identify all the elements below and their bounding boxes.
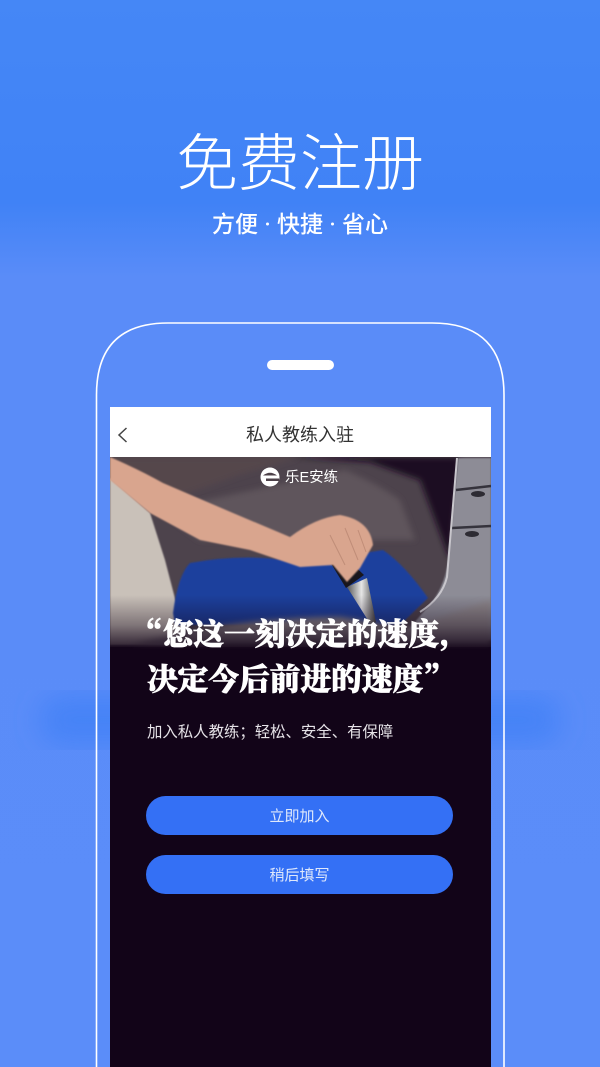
subtitle: 方便 <box>212 211 258 237</box>
button: fill later <box>146 855 453 894</box>
button: join now <box>146 796 453 835</box>
subtitle <box>212 211 388 237</box>
gear knob <box>332 564 376 624</box>
logo <box>260 468 338 486</box>
subtitle: 省心 <box>342 211 388 237</box>
fade <box>110 598 491 649</box>
header bar <box>110 407 491 457</box>
app screen <box>110 407 491 1067</box>
headline line 2: 决定今后前进的速度” <box>147 655 454 699</box>
icon: e logo <box>260 468 280 486</box>
arm <box>110 457 373 582</box>
shirt <box>110 478 185 645</box>
jeans <box>173 550 428 625</box>
seat front <box>146 603 491 644</box>
finger creases <box>330 528 366 565</box>
headline <box>132 610 454 699</box>
headline line 1: “您这一刻决定的速度, <box>132 610 449 654</box>
photo: hand on gear shift <box>110 457 491 1067</box>
car interior backdrop <box>110 457 491 647</box>
title: 免费注册 <box>176 130 424 199</box>
phone speaker <box>267 360 334 370</box>
button: join now: 立即加入 <box>269 808 330 825</box>
icon: back arrow <box>119 428 126 442</box>
brand name: 乐E安练 <box>285 469 338 486</box>
header title: 私人教练入驻 <box>246 425 354 445</box>
subtitle: 快捷 <box>277 211 323 237</box>
console <box>410 457 491 638</box>
description: 加入私人教练；轻松、安全、有保障 <box>147 723 393 741</box>
button: fill later: 稍后填写 <box>269 867 330 884</box>
phone outline <box>96 323 504 1067</box>
blurred band behind phone <box>40 695 560 745</box>
